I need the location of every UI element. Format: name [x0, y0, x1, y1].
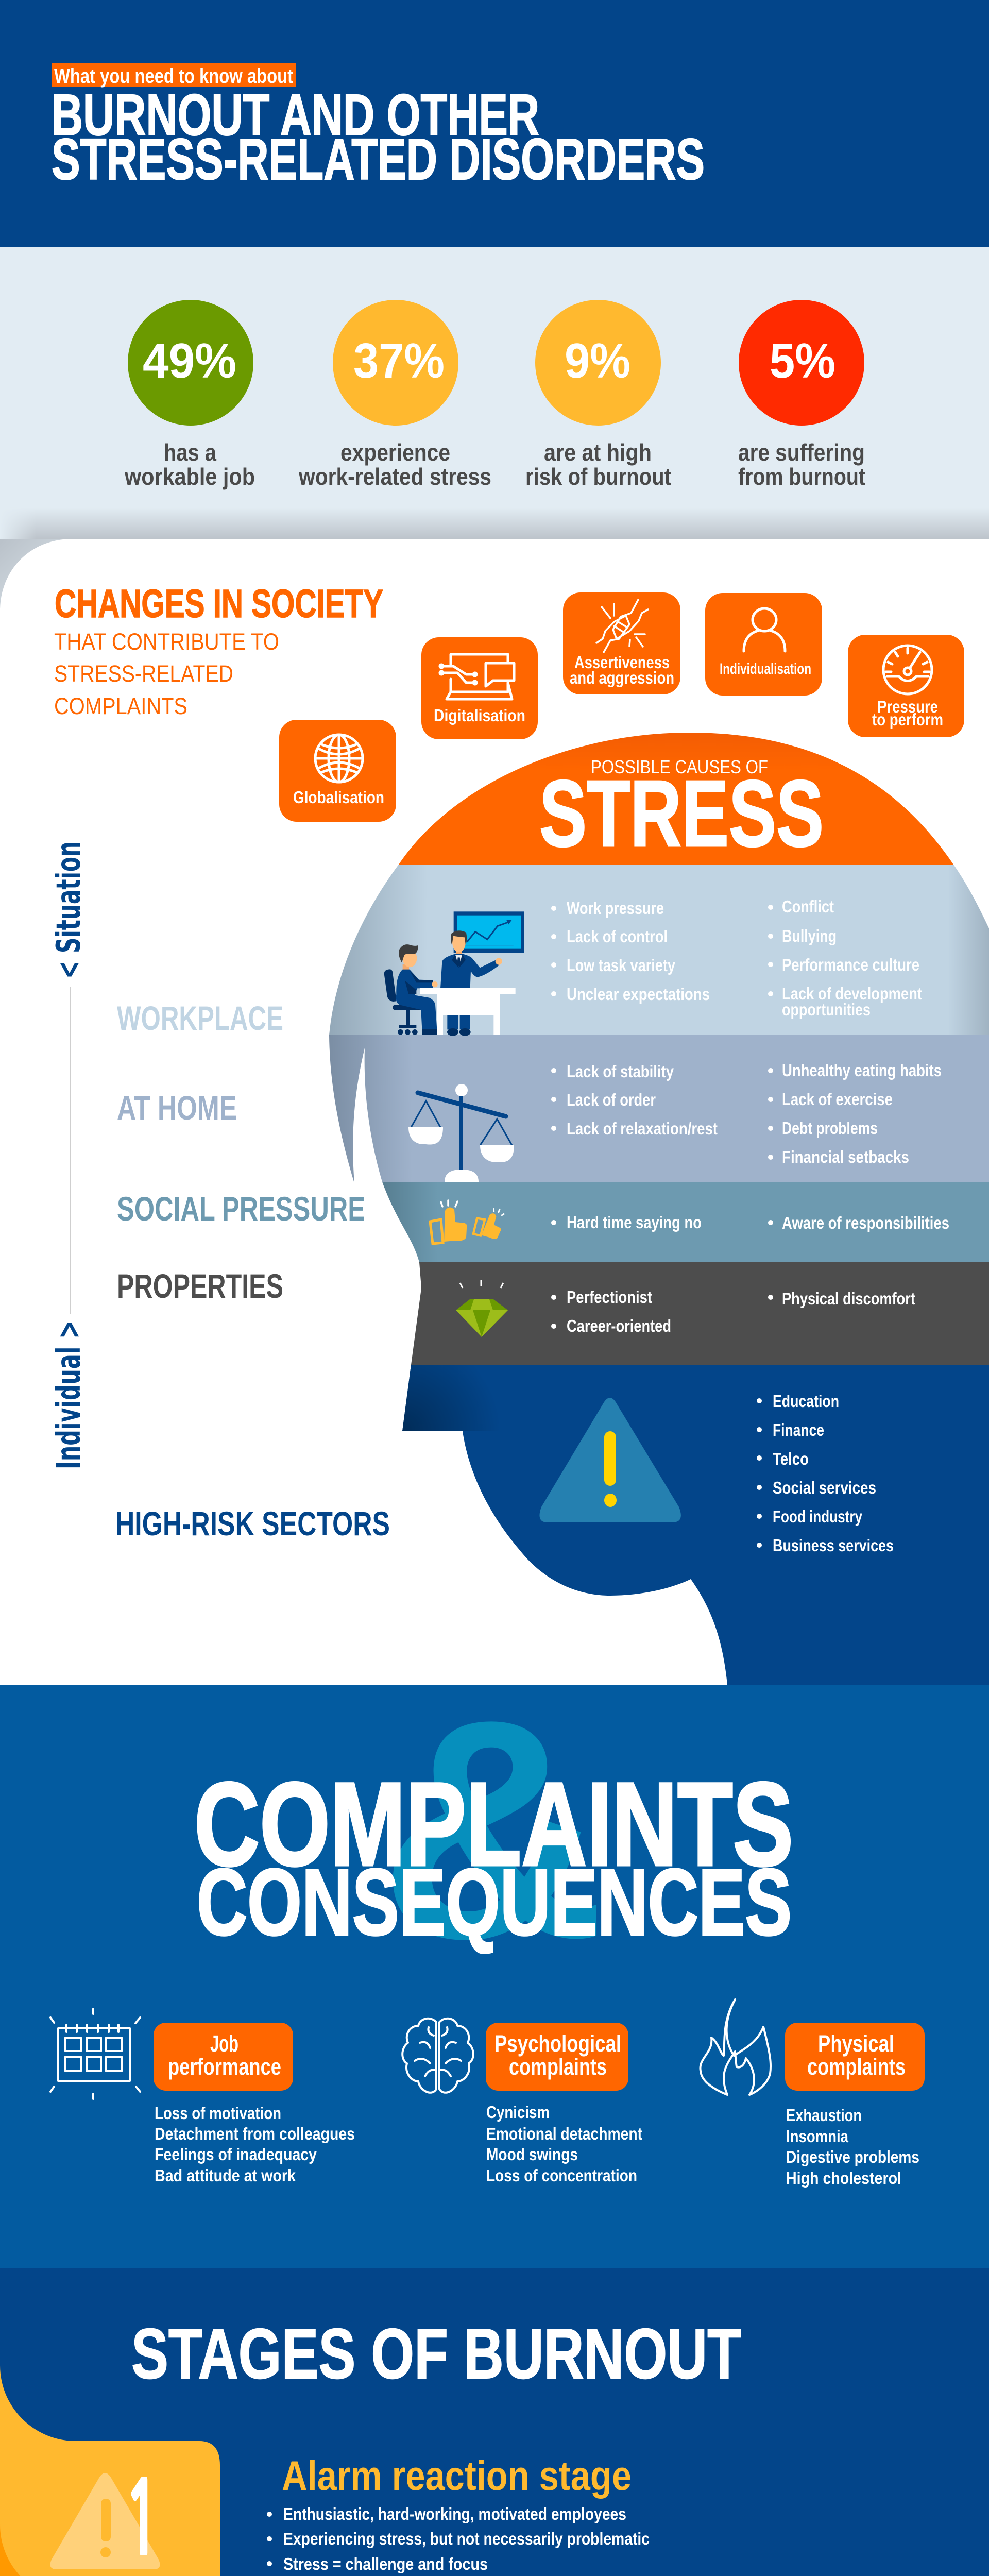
- list: sectors: Telco: [773, 1449, 809, 1468]
- stage block: resistance: [0, 2524, 220, 2576]
- band: workplace: WORKPLACE: [117, 999, 283, 1037]
- band: at home: [117, 1061, 942, 1182]
- list: workplace causes: Lack of control: [567, 927, 668, 946]
- stat 49%: workable job: [124, 463, 255, 490]
- stat 37%: [298, 300, 491, 490]
- icon: calendar: [50, 2009, 140, 2099]
- list: social causes: Aware of responsibilities: [782, 1213, 949, 1232]
- column: psychological complaints: Psychological: [494, 2030, 621, 2057]
- list: sectors: Social services: [773, 1478, 876, 1497]
- list: sectors: [757, 1392, 894, 1555]
- icon: thumbs up: [430, 1200, 508, 1244]
- list: home causes: Lack of relaxation/rest: [567, 1119, 718, 1138]
- tile: pressure to perform: [848, 635, 964, 737]
- stage block: alarm reaction: 1: [124, 2470, 161, 2569]
- head silhouette with bands: [309, 721, 989, 1685]
- band: social pressure: [117, 1190, 949, 1244]
- tile: assertiveness and aggression: Assertiveness: [574, 653, 670, 672]
- list: sectors: Finance: [773, 1420, 824, 1439]
- heading: changes in society: [54, 582, 383, 719]
- column: physical complaints: Exhaustion: [786, 2106, 862, 2125]
- stat 5%: [738, 300, 865, 490]
- icon: clashing hands: [596, 600, 648, 652]
- column: physical complaints: Insomnia: [786, 2127, 849, 2146]
- column: job performance: Detachment from colleagues: [155, 2124, 355, 2143]
- list: home causes: Unhealthy eating habits: [782, 1061, 942, 1080]
- vertical axis labels: [50, 841, 88, 1469]
- column: physical complaints: High cholesterol: [786, 2168, 901, 2188]
- icon: globe: [315, 735, 363, 782]
- heading: possible causes of stress: STRESS: [539, 760, 824, 866]
- icon: warning sign: [50, 2473, 160, 2569]
- list: social causes: Hard time saying no: [567, 1213, 702, 1232]
- column: job performance: performance: [168, 2054, 281, 2080]
- column: physical complaints: Digestive problems: [786, 2147, 919, 2166]
- list: sectors: Food industry: [773, 1507, 863, 1526]
- icon: warning triangle: [539, 1398, 681, 1522]
- stage text: alarm reaction: Stress = challenge and focus: [283, 2554, 488, 2573]
- list: workplace causes: Unclear expectations: [567, 985, 710, 1004]
- column: job performance: Feelings of inadequacy: [155, 2145, 317, 2164]
- band: properties: [117, 1267, 915, 1337]
- stat 37%: work-related stress: [298, 463, 491, 490]
- column: psychological complaints: [402, 2019, 642, 2185]
- panel: stages of burnout: [0, 2268, 989, 2576]
- tile: assertiveness and aggression: and aggression: [570, 668, 674, 687]
- column: job performance: Job: [210, 2030, 238, 2057]
- panel: causes of stress: [0, 539, 989, 1685]
- main title: STRESS-RELATED DISORDERS: [52, 127, 705, 192]
- column: physical complaints: complaints: [807, 2054, 906, 2080]
- band: at home: AT HOME: [117, 1089, 237, 1127]
- stage text: alarm reaction: [267, 2453, 650, 2573]
- list: property causes: Career-oriented: [567, 1316, 671, 1335]
- band: properties: PROPERTIES: [117, 1267, 283, 1305]
- tile: globalisation: Globalisation: [293, 788, 384, 807]
- list: sectors: Business services: [773, 1536, 894, 1555]
- stage block: alarm reaction: [0, 2365, 220, 2576]
- tile: globalisation: [279, 720, 396, 822]
- list: workplace causes: Conflict: [782, 897, 834, 916]
- heading: changes in society: CHANGES IN SOCIETY: [55, 582, 383, 626]
- column: job performance: Bad attitude at work: [155, 2166, 296, 2185]
- stat 49%: has a: [164, 439, 216, 466]
- tile: digitalisation: [421, 637, 538, 739]
- list: workplace causes: Performance culture: [782, 955, 919, 974]
- list: home causes: Lack of stability: [567, 1062, 674, 1081]
- stat 49%: [124, 300, 255, 490]
- stat 9%: 9%: [565, 333, 630, 388]
- band: high-risk sectors: [115, 1392, 894, 1555]
- stat 37%: experience: [340, 439, 450, 466]
- tile: individualisation: Individualisation: [720, 660, 811, 677]
- panel: complaints and consequences: [0, 1655, 989, 2268]
- main title: BURNOUT AND OTHER: [52, 82, 539, 147]
- icon: scales: [408, 1084, 514, 1182]
- heading: changes in society: THAT CONTRIBUTE TO: [54, 629, 279, 655]
- tile: individualisation: [705, 593, 822, 696]
- stat 5%: from burnout: [738, 463, 865, 490]
- band: social pressure: SOCIAL PRESSURE: [117, 1190, 365, 1228]
- heading: complaints & consequences: CONSEQUENCES: [197, 1849, 792, 1955]
- icon: gem: [456, 1280, 508, 1337]
- main title: [52, 82, 705, 192]
- column: job performance: Loss of motivation: [155, 2104, 281, 2123]
- stat 5%: 5%: [770, 333, 835, 388]
- stat 37%: 37%: [353, 333, 445, 388]
- band: workplace: [117, 897, 922, 1037]
- heading: changes in society: COMPLAINTS: [54, 693, 187, 719]
- column: psychological complaints: Emotional detachment: [486, 2124, 642, 2143]
- stat 9%: [525, 300, 671, 490]
- icon: gauge: [883, 646, 932, 694]
- heading: changes in society: STRESS-RELATED: [54, 660, 233, 687]
- list: property causes: Physical discomfort: [782, 1289, 915, 1308]
- heading: complaints & consequences: COMPLAINTS: [194, 1758, 793, 1890]
- tile: pressure to perform: Pressure: [877, 697, 938, 716]
- stage text: alarm reaction: Alarm reaction stage: [282, 2453, 632, 2499]
- column: physical complaints: [700, 1999, 925, 2188]
- column: psychological complaints: Mood swings: [486, 2145, 578, 2164]
- heading: complaints & consequences: [194, 1655, 793, 2004]
- icon: flame: [700, 1999, 771, 2095]
- list: home causes: Debt problems: [782, 1118, 878, 1138]
- header band: [0, 0, 989, 247]
- stage text: alarm reaction: Experiencing stress, but not necessarily problematic: [283, 2529, 650, 2548]
- vertical axis labels: Individual >: [50, 1320, 88, 1469]
- heading: possible causes of stress: POSSIBLE CAUSES OF: [591, 756, 768, 777]
- list: property causes: Perfectionist: [567, 1287, 652, 1307]
- kicker tag: What you need to know about: [54, 65, 293, 88]
- stat 9%: are at high: [544, 439, 652, 466]
- stat 5%: are suffering: [738, 439, 865, 466]
- heading: complaints & consequences: &: [379, 1655, 606, 2004]
- tile: pressure to perform: to perform: [872, 710, 943, 729]
- list: workplace causes: opportunities: [782, 1000, 871, 1019]
- list: home causes: Lack of order: [567, 1090, 656, 1109]
- statistics band: [0, 247, 989, 608]
- column: physical complaints: Physical: [818, 2030, 894, 2057]
- column: psychological complaints: Cynicism: [486, 2103, 550, 2122]
- list: workplace causes: [551, 897, 922, 1019]
- column: psychological complaints: complaints: [509, 2054, 607, 2080]
- list: workplace causes: Low task variety: [567, 956, 676, 975]
- list: workplace causes: Bullying: [782, 926, 837, 945]
- icon: person: [744, 608, 785, 651]
- column: psychological complaints: Loss of concentration: [486, 2166, 637, 2185]
- icon: brain: [402, 2019, 473, 2093]
- list: social causes: [551, 1213, 949, 1232]
- list: property causes: [551, 1287, 915, 1335]
- list: home causes: Financial setbacks: [782, 1147, 909, 1166]
- tile: assertiveness and aggression: [563, 592, 680, 694]
- list: workplace causes: Lack of development: [782, 984, 922, 1003]
- band: high-risk sectors: HIGH-RISK SECTORS: [115, 1504, 390, 1543]
- stat 49%: 49%: [143, 333, 236, 388]
- list: home causes: [551, 1061, 942, 1166]
- title: stages of burnout: STAGES OF BURNOUT: [131, 2314, 741, 2394]
- stage text: alarm reaction: Enthusiastic, hard-working, motivated employees: [283, 2504, 626, 2523]
- stat 9%: risk of burnout: [525, 463, 671, 490]
- column: job performance: [50, 2009, 355, 2185]
- list: workplace causes: Work pressure: [567, 899, 664, 918]
- list: sectors: Education: [773, 1392, 839, 1411]
- list: home causes: Lack of exercise: [782, 1090, 893, 1109]
- tile: digitalisation: Digitalisation: [434, 706, 525, 725]
- vertical axis labels: < Situation: [50, 841, 88, 979]
- icon: laptop with chat: [440, 654, 514, 699]
- illustration: office meeting: [384, 911, 524, 1036]
